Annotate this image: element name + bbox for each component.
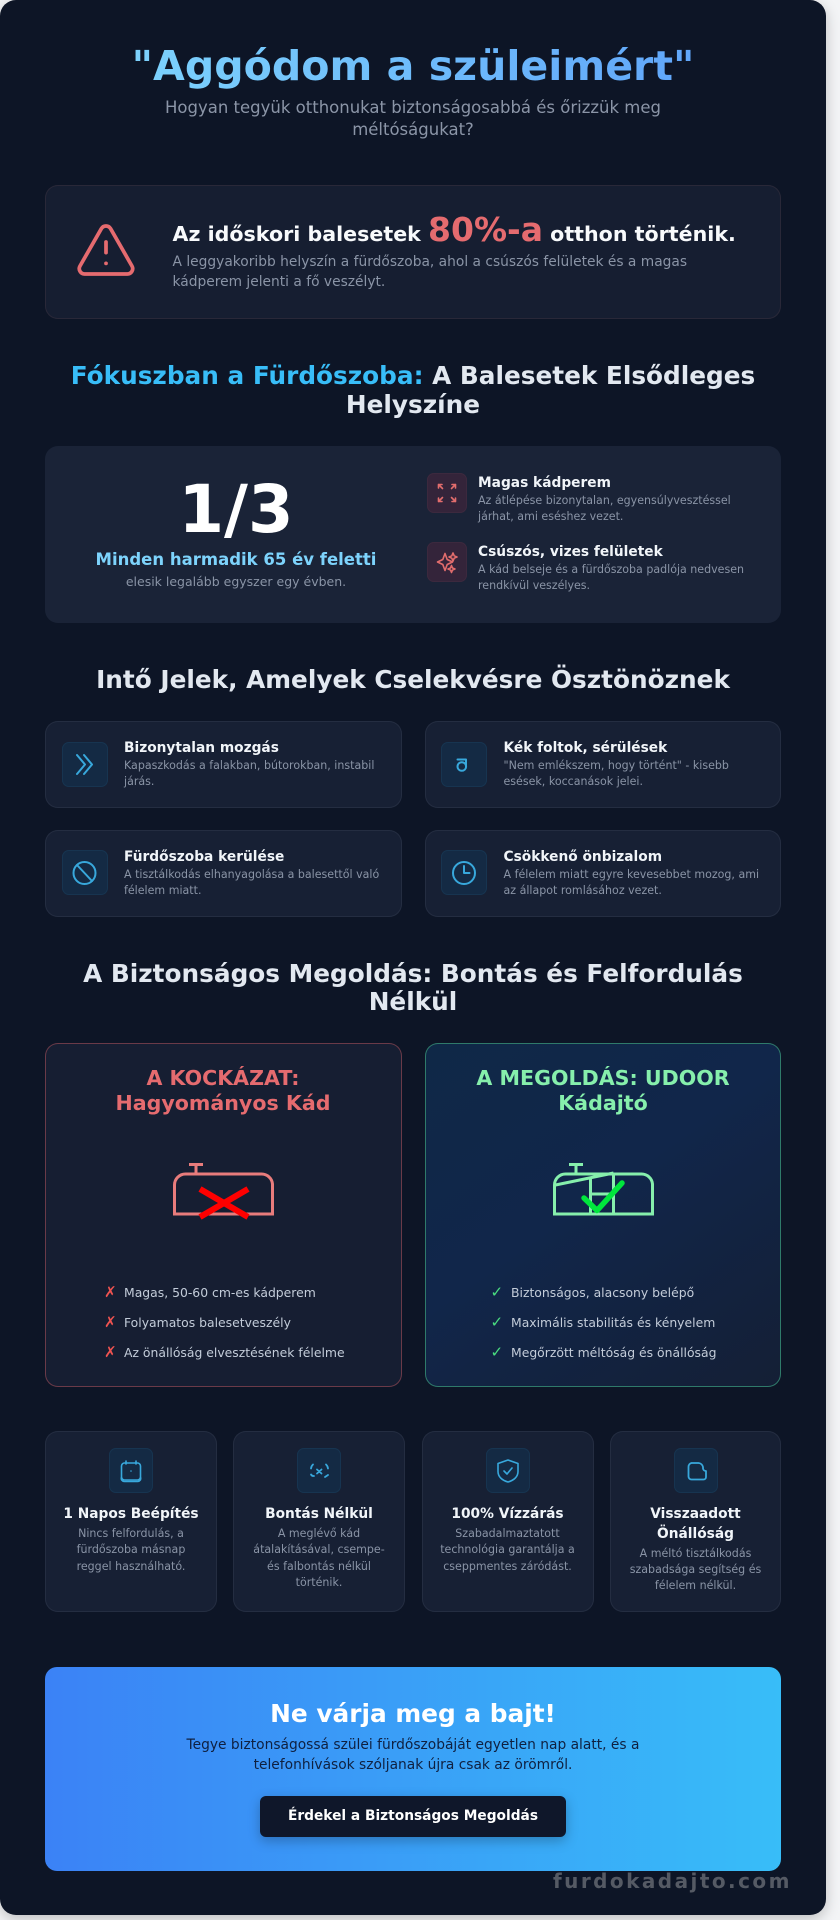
feature description: szabadsága segítség és [630,1563,761,1576]
cta button: Érdekel a Biztonságos Megoldás [288,1808,538,1824]
sign text [504,740,729,788]
feature description: Nincs felfordulás, a [78,1527,184,1540]
cross mark list item: ✗ [104,1313,117,1331]
panel: the solution, UDOOR tub door [424,1043,781,1387]
stat caption: Minden harmadik 65 év feletti [96,550,376,569]
sign text [124,849,379,897]
panel: warning sign unsteady movement [45,721,402,808]
icon: clock [441,850,487,895]
icon: high rim [427,473,467,513]
feature title: Önállóság [657,1526,734,1542]
risk title [115,1066,331,1115]
feature description: technológia garantálja a [440,1543,575,1556]
icon: bruise mark [441,742,487,787]
panel: waterproof [422,1431,594,1612]
sign description: A tisztálkodás elhanyagolása a balesettől való [124,868,379,881]
sign description [504,759,729,788]
solution title: Kádajtó [558,1091,648,1115]
solution title: A MEGOLDÁS: UDOOR [476,1066,730,1090]
cross mark list item: Az önállóság elvesztésének félelme [124,1345,345,1360]
sign description: esések, koccanások jelei. [504,775,643,788]
icon: dashed corners with x [297,1448,341,1493]
risk title: A KOCKÁZAT: [146,1066,300,1090]
cta description: telefonhívások szóljanak újra csak az örömről. [254,1756,572,1772]
panel: one in three [45,446,781,623]
sign title: Fürdőszoba kerülése [124,849,284,865]
check mark list item: ✓ [490,1283,503,1301]
panel: regained independence [610,1431,781,1612]
cross mark list item: Magas, 50-60 cm-es kádperem [124,1285,316,1300]
panel: the risk, traditional tub [45,1043,402,1387]
risk description: A kád belseje és a fürdőszoba padlója nedvesen [478,563,744,576]
watermark: furdokadajto.com [553,1869,792,1893]
risk list [104,1283,345,1361]
sign description [504,868,759,897]
feature description [630,1546,761,1592]
check mark list item: ✓ [490,1313,503,1331]
panel: warning sign declining confidence [424,830,781,917]
check mark list item: ✓ [490,1343,503,1361]
subtitle: méltóságukat? [352,120,474,139]
feature title: 100% Vízzárás [451,1506,564,1522]
heading: warning signs: Intő Jelek, Amelyek Cselekvésre Ösztönöznek [96,665,730,694]
heading: focus on bathroom [71,361,755,418]
statistic description: A leggyakoribb helyszín a fürdőszoba, ahol a csúszós felületek és a magas [172,254,687,270]
feature description: átalakításával, csempe- [253,1543,385,1556]
sign title: Csökkenő önbizalom [504,849,662,865]
icon: chevrons [62,742,108,787]
cross mark list item: Folyamatos balesetveszély [124,1315,291,1330]
sign text [124,740,374,788]
icon: ban circle [62,850,108,895]
solution title [476,1066,730,1115]
feature description: Szabadalmaztatott [455,1527,560,1540]
sign description: az állapot romlásához vezet. [504,884,662,897]
feature description: cseppmentes záródást. [443,1560,572,1573]
check mark list item: Biztonságos, alacsony belépő [511,1285,694,1300]
risk: high rim [478,475,731,523]
feature description: történik. [296,1576,342,1589]
icon: tub with red cross [173,1163,274,1220]
risk description [478,494,731,523]
statistic description [172,254,687,290]
panel: one day installation [45,1431,217,1612]
panel: warning sign avoiding bathroom [45,830,402,917]
cta description: Tegye biztonságossá szülei fürdőszobáját egyetlen nap alatt, és a [187,1737,639,1753]
icon: warning triangle [77,224,135,276]
icon: slippery sparkles [427,542,467,582]
feature title [650,1506,741,1542]
title: "Aggódom a szüleimért" [132,42,694,90]
sign description [124,868,379,897]
heading: the safe solution [83,959,743,1016]
feature description: A méltó tisztálkodás [640,1546,751,1560]
subtitle [165,98,661,139]
cross mark list item: ✗ [104,1343,117,1361]
cta description [186,1737,639,1772]
solution list [490,1283,716,1361]
feature description: reggel használható. [77,1560,185,1573]
check mark list item: Maximális stabilitás és kényelem [511,1315,715,1330]
stat sub caption: elesik legalább egyszer egy évben. [126,574,346,589]
panel: 80% statistic [45,185,781,319]
sign description: járás. [124,775,154,788]
feature description [440,1527,575,1573]
icon: calendar [109,1448,153,1493]
feature description: és falbontás nélkül [267,1560,371,1573]
sign title: Bizonytalan mozgás [124,740,279,756]
sign description: "Nem emlékszem, hogy történt" - kisebb [504,759,729,772]
panel: no demolition [233,1431,405,1612]
cross mark list item: ✗ [104,1283,117,1301]
icon: rounded door shape [674,1448,718,1493]
big number 1/3: 1/3 [178,472,294,548]
sign description [124,759,374,788]
risk description: Az átlépése bizonytalan, egyensúlyvesztéssel [478,494,731,507]
heading: the safe solution: A Biztonságos Megoldás: Bontás és Felfordulás [83,959,743,988]
sign description: A félelem miatt egyre kevesebbet mozog, ami [504,868,759,881]
sign text [504,849,759,897]
heading: the safe solution: Nélkül [369,987,457,1016]
feature description: A meglévő kád [278,1527,360,1540]
check mark list item: Megőrzött méltóság és önállóság [511,1345,716,1360]
risk: slippery surfaces [478,544,744,592]
cta button [260,1796,566,1837]
risk title: Hagyományos Kád [115,1091,331,1115]
risk description [478,563,744,592]
feature title: Bontás Nélkül [265,1506,373,1522]
heading: focus on bathroom: Fókuszban a Fürdőszoba: A Balesetek Elsődleges [71,361,755,390]
risk title: Magas kádperem [478,475,611,491]
risk description: rendkívül veszélyes. [478,579,590,592]
feature description [76,1527,185,1573]
feature description: fürdőszoba másnap [77,1543,185,1556]
feature description [253,1527,385,1589]
icon: tub with door and green check [553,1163,654,1216]
cta heading: Ne várja meg a bajt! [270,1699,556,1728]
feature title: 1 Napos Beépítés [63,1506,199,1522]
icon: shield check [486,1448,530,1493]
statistic description: kádperem jelenti a fő veszélyt. [172,274,385,290]
subtitle: Hogyan tegyük otthonukat biztonságosabbá és őrizzük meg [165,98,661,117]
sign description: félelem miatt. [124,884,201,897]
panel: warning sign bruises [424,721,781,808]
heading: focus on bathroom: Helyszíne [346,390,480,418]
sign title: Kék foltok, sérülések [504,740,667,756]
risk title: Csúszós, vizes felületek [478,544,663,560]
panel: call to action [45,1667,781,1871]
statistic headline: Az időskori balesetek 80%-a otthon történik. [172,210,736,249]
sign description: Kapaszkodás a falakban, bútorokban, instabil [124,759,374,772]
risk description: járhat, ami eséshez vezet. [478,510,623,523]
feature title: Visszaadott [650,1506,741,1522]
feature description: félelem nélkül. [655,1579,736,1592]
